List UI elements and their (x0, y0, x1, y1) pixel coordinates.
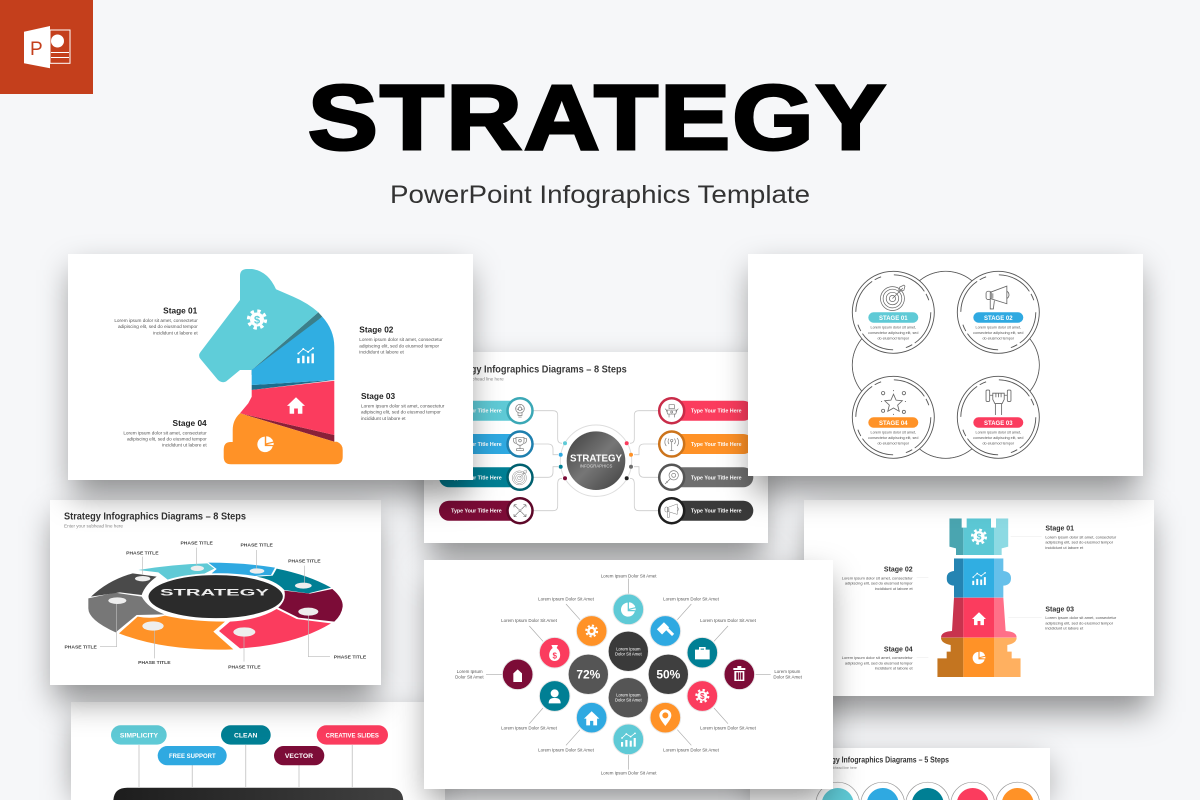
icon: pie chart (257, 436, 274, 452)
stage labels: Lorem ipsum dolor sit amet, consectetur (1045, 615, 1117, 620)
leader lines (486, 579, 771, 770)
icon: gear dollar (972, 530, 986, 543)
central stat circles: Lorem Ipsum (616, 646, 641, 651)
icon: gear dollar: $ (254, 314, 260, 326)
radial labels (455, 573, 803, 775)
stage 04 label (123, 418, 207, 448)
panel: radial icons slide (424, 560, 833, 789)
slide heading: 8 steps: Enter your subhead line here (445, 377, 504, 382)
radial labels: Lorem Ipsum Dolor Sit Amet (538, 596, 595, 601)
central stat circles: 50% (656, 668, 681, 682)
stage 01: STAGE 01 (879, 316, 908, 322)
icon: gear dollar (696, 690, 708, 702)
icon: house (584, 711, 599, 725)
stage 04 label: incididunt ut labore et (162, 443, 207, 448)
panel: bottom-left feature pills slide (71, 702, 445, 800)
rook diagram (842, 515, 1117, 678)
icon: gavel (657, 622, 674, 636)
stage labels: adipiscing elit, sed do eiusmod tempor (845, 581, 913, 586)
stage 03: STAGE 03 (984, 421, 1013, 427)
subtitle: PowerPoint Infographics Template (390, 181, 810, 209)
icon: gear dollar: $ (700, 692, 705, 701)
stage labels (842, 526, 1117, 671)
slide heading: phase wheel (64, 512, 246, 529)
stage 01 label: Stage 01 (163, 305, 198, 315)
stage 04 label: Stage 04 (173, 418, 207, 428)
stage 02 label: Lorem ipsum dolor sit amet, consectetur (359, 337, 443, 342)
stage 01: consectetur adipiscing elit, sed (868, 331, 918, 335)
wheel diagram (64, 540, 367, 671)
phase leader lines and labels: PHASE TITLE (288, 559, 321, 565)
icon: bar chart (972, 572, 986, 585)
step pill: right 2 (659, 432, 753, 456)
radial labels: Lorem Ipsum Dolor Sit Amet (663, 747, 720, 752)
stage 04 (852, 376, 934, 458)
step pill: right 4 (659, 498, 753, 523)
step pill: right 1: Type Your Title Here (691, 409, 742, 415)
stage 02 label (359, 325, 443, 355)
radial labels: Lorem Ipsum Dolor Sit Amet (700, 726, 757, 731)
step pill: right 3 (659, 465, 753, 490)
icon: gear dollar: $ (977, 532, 982, 542)
background outline circles (852, 271, 1039, 458)
icon: briefcase (695, 647, 710, 659)
hub circle: strategy infographics (560, 425, 632, 496)
phase leader lines and labels: PHASE TITLE (240, 543, 274, 549)
stage 01: Lorem ipsum dolor sit amet, (871, 326, 916, 330)
pill: free support: FREE SUPPORT (169, 754, 216, 760)
phase leader lines and labels (64, 540, 367, 671)
stage 02: Lorem ipsum dolor sit amet, (976, 326, 1021, 330)
stage labels: Stage 03 (1045, 607, 1074, 614)
icon: money bag: $ (552, 651, 557, 660)
pill: creative slides: CREATIVE SLIDES (326, 734, 379, 740)
radial labels: Lorem Ipsum Dolor Sit Amet (700, 618, 757, 623)
stage 01 label: adipiscing elit, sed do eiusmod tempor (118, 324, 198, 329)
icon: pie chart (621, 602, 636, 617)
dark base bar (113, 788, 403, 800)
stage labels: Stage 02 (884, 567, 913, 574)
pill: vector (274, 746, 324, 765)
panel: 8 steps hub diagram slide (424, 352, 768, 543)
stage 01 label (114, 305, 198, 336)
pill: free support (158, 746, 227, 765)
connector lines (533, 411, 659, 511)
radial labels: Lorem Ipsum Dolor Sit Amet (601, 770, 657, 775)
stage 02: STAGE 02 (984, 316, 1013, 322)
step pill: left 3 (439, 465, 532, 490)
stage 04: consectetur adipiscing elit, sed (868, 436, 918, 440)
phase leader lines and labels: PHASE TITLE (126, 550, 159, 556)
slide heading: 5 steps: Enter your subhead line here (812, 766, 857, 770)
stage 04 label: Lorem ipsum dolor sit amet, consectetur (123, 430, 207, 435)
stage labels: adipiscing elit, sed do eiusmod tempor (845, 660, 913, 665)
icon: price tag (513, 669, 522, 682)
stage labels: Lorem ipsum dolor sit amet, consectetur (1045, 534, 1117, 539)
step pill: left 3: Type Your Title Here (451, 475, 502, 481)
phase leader lines and labels: PHASE TITLE (228, 665, 261, 671)
radial labels: Lorem Ipsum Dolor Sit Amet (501, 618, 558, 623)
icon: bar chart (621, 732, 636, 747)
icon: bar chart (297, 347, 314, 363)
stage 03 (957, 376, 1039, 458)
stage 02 label: incididunt ut labore et (359, 350, 405, 355)
icon: PowerPoint logo: P (30, 39, 43, 60)
icon: trash (733, 666, 745, 681)
central stat circles: 72% (576, 668, 601, 682)
pill: clean (221, 725, 271, 745)
central stat circles (568, 631, 688, 718)
pill: creative slides (317, 725, 388, 745)
phase leader lines and labels: PHASE TITLE (64, 644, 98, 650)
slide heading: 5 steps (812, 756, 950, 770)
stage 02: do eiusmod tempor (983, 336, 1015, 340)
stage labels: incididunt ut labore et (875, 666, 914, 671)
icon: gear (586, 626, 597, 636)
radial labels: Dolor Sit Amet (773, 674, 803, 679)
radial labels: Dolor Sit Amet (455, 674, 484, 679)
stage 02: consectetur adipiscing elit, sed (973, 331, 1023, 335)
phase leader lines and labels: PHASE TITLE (138, 660, 171, 666)
stage labels: Lorem ipsum dolor sit amet, consectetur (842, 655, 913, 660)
slide heading: 5 steps: Strategy Infographics Diagrams – 5 Steps (812, 756, 950, 765)
radial labels: Lorem Ipsum Dolor Sit Amet (538, 747, 595, 752)
wheel centre: strategy: STRATEGY (160, 588, 271, 598)
stage labels: incididunt ut labore et (875, 586, 914, 591)
header: logo and title (0, 0, 888, 209)
connector lines (139, 745, 352, 788)
radial labels: Lorem Ipsum Dolor Sit Amet (663, 596, 720, 601)
stage 03 label (361, 391, 445, 421)
panel: rook stages slide (804, 500, 1154, 696)
title: STRATEGY (308, 66, 888, 169)
slide heading: phase wheel: Enter your subhead line here (64, 524, 123, 529)
step pill: left 1 (439, 398, 532, 423)
radial labels: Lorem Ipsum (457, 669, 483, 674)
slide heading: 8 steps: Strategy Infographics Diagrams – 8 Steps (445, 364, 627, 375)
panel: four stage circles slide (748, 254, 1143, 476)
step pill: right 4: Type Your Title Here (691, 509, 742, 515)
stage labels: Lorem ipsum dolor sit amet, consectetur (842, 575, 913, 580)
pill: simplicity: SIMPLICITY (120, 733, 159, 740)
stage 02 label: Stage 02 (359, 325, 394, 335)
stage 02 label: adipiscing elit, sed do eiusmod tempor (359, 343, 439, 348)
stage labels: incididunt ut labore et (1045, 545, 1084, 550)
stage labels: adipiscing elit, sed do eiusmod tempor (1045, 620, 1114, 625)
radial labels: Lorem Ipsum Dolor Sit Amet (601, 573, 657, 578)
icon: money bag (549, 645, 560, 661)
stage 04 label: adipiscing elit, sed do eiusmod tempor (127, 436, 207, 442)
panel: 5 steps slide (750, 748, 1050, 800)
stage labels: incididunt ut labore et (1045, 626, 1084, 631)
stage 01 (852, 271, 934, 353)
stage 01: do eiusmod tempor (878, 336, 910, 340)
stage 03: do eiusmod tempor (983, 441, 1015, 445)
pill: simplicity (111, 725, 167, 745)
step pill: left 4: Type Your Title Here (451, 509, 502, 515)
icon: house (287, 397, 305, 414)
pill: clean: CLEAN (234, 733, 257, 740)
step pill: left 4 (439, 498, 532, 523)
hub circle: strategy infographics: STRATEGY (570, 454, 623, 464)
knight diagram (199, 269, 343, 464)
radial labels: Lorem Ipsum Dolor Sit Amet (501, 726, 558, 731)
connector dots (559, 441, 633, 480)
stage 01 label: incididunt ut labore et (153, 330, 198, 336)
stage 02 (957, 271, 1039, 353)
slide heading: phase wheel: Strategy Infographics Diagrams – 8 Steps (64, 512, 246, 523)
stage 01 label: Lorem ipsum dolor sit amet, consectetur (114, 318, 198, 323)
icon: PowerPoint logo (0, 0, 93, 94)
stage 03 label: Lorem ipsum dolor sit amet, consectetur (361, 403, 445, 408)
step pill: right 3: Type Your Title Here (691, 475, 742, 481)
panel: knight stages slide (68, 254, 473, 480)
icon: person (549, 689, 561, 703)
icon: pie chart (973, 652, 985, 664)
pill: vector: VECTOR (285, 753, 313, 760)
phase leader lines and labels: PHASE TITLE (180, 540, 214, 546)
stage 04: do eiusmod tempor (878, 441, 910, 445)
central stat circles: Dolor Sit Amet (615, 651, 642, 656)
step pill: right 2: Type Your Title Here (691, 442, 742, 448)
central stat circles: Lorem Ipsum (616, 693, 641, 698)
step circles row (816, 782, 1039, 800)
stage 03 label: Stage 03 (361, 391, 396, 401)
icon: house (972, 612, 986, 625)
stage labels: adipiscing elit, sed do eiusmod tempor (1045, 540, 1114, 545)
icon circles (502, 594, 755, 755)
step pill: left 1: Type Your Title Here (451, 409, 502, 415)
icon: map pin (659, 709, 671, 726)
stage 03: consectetur adipiscing elit, sed (973, 436, 1023, 440)
stage labels: Stage 01 (1045, 526, 1074, 533)
icon: gear dollar (248, 311, 266, 328)
panel: phase wheel slide (50, 500, 381, 685)
central stat circles: Dolor Sit Amet (615, 698, 642, 703)
stage 03: Lorem ipsum dolor sit amet, (976, 431, 1021, 435)
phase leader lines and labels: PHASE TITLE (334, 654, 367, 660)
step pill: right 1 (659, 398, 753, 423)
slide heading: 8 steps (445, 364, 627, 382)
radial labels: Lorem Ipsum (774, 669, 801, 674)
stage 03 label: adipiscing elit, sed do eiusmod tempor (361, 410, 441, 414)
stage labels: Stage 04 (884, 646, 913, 653)
stage 03 label: incididunt ut labore et (361, 416, 406, 421)
hub circle: strategy infographics: INFOGRAPHICS (580, 464, 612, 468)
stage 04: Lorem ipsum dolor sit amet, (871, 431, 916, 435)
wheel centre: strategy (148, 574, 284, 619)
step pill: left 2: Type Your Title Here (451, 442, 502, 448)
step pill: left 2 (439, 432, 532, 456)
stage 04: STAGE 04 (879, 421, 908, 427)
